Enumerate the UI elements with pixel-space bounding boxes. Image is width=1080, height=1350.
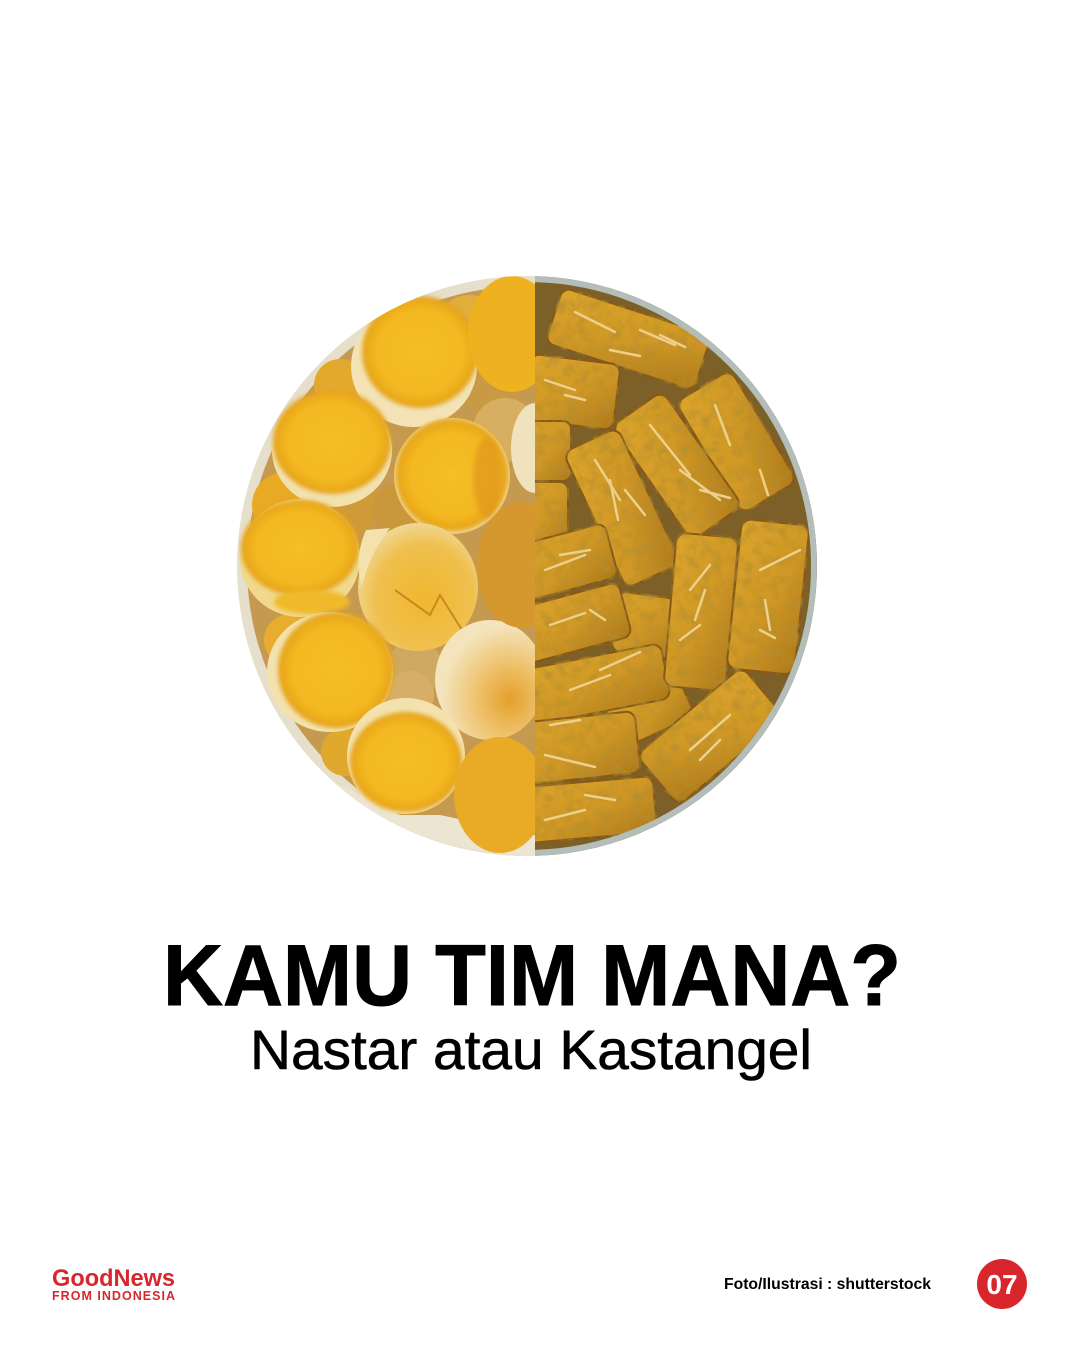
cheese shreds	[545, 312, 800, 820]
nastar cookie	[511, 403, 535, 493]
nastar cookie	[468, 276, 535, 392]
page number badge	[977, 1259, 1027, 1309]
title: KAMU TIM MANA?	[163, 928, 901, 1024]
logo: GoodNews from Indonesia: GoodNews	[52, 1265, 175, 1292]
nastar cookie	[351, 296, 478, 427]
logo: GoodNews from Indonesia: FROM INDONESIA	[52, 1289, 175, 1303]
nastar cookie	[267, 612, 394, 732]
nastar cookie	[347, 698, 465, 814]
nastar cookie	[394, 418, 510, 534]
nastar cookie	[272, 390, 392, 507]
panel: nastar half	[237, 276, 535, 856]
nastar cookie	[477, 502, 535, 628]
nastar cookie	[435, 620, 545, 740]
nastar cookie	[240, 499, 360, 617]
nastar cookie	[454, 737, 535, 853]
nastar cookie	[358, 523, 478, 651]
page number badge: 07	[986, 1269, 1018, 1300]
photo credit: Foto/Ilustrasi : shutterstock	[724, 1276, 931, 1293]
photo: cookie jar split circle	[230, 270, 835, 870]
kastangel sticks group	[511, 287, 810, 844]
panel: kastangel half	[535, 276, 817, 856]
subtitle: Nastar atau Kastangel	[250, 1018, 812, 1081]
